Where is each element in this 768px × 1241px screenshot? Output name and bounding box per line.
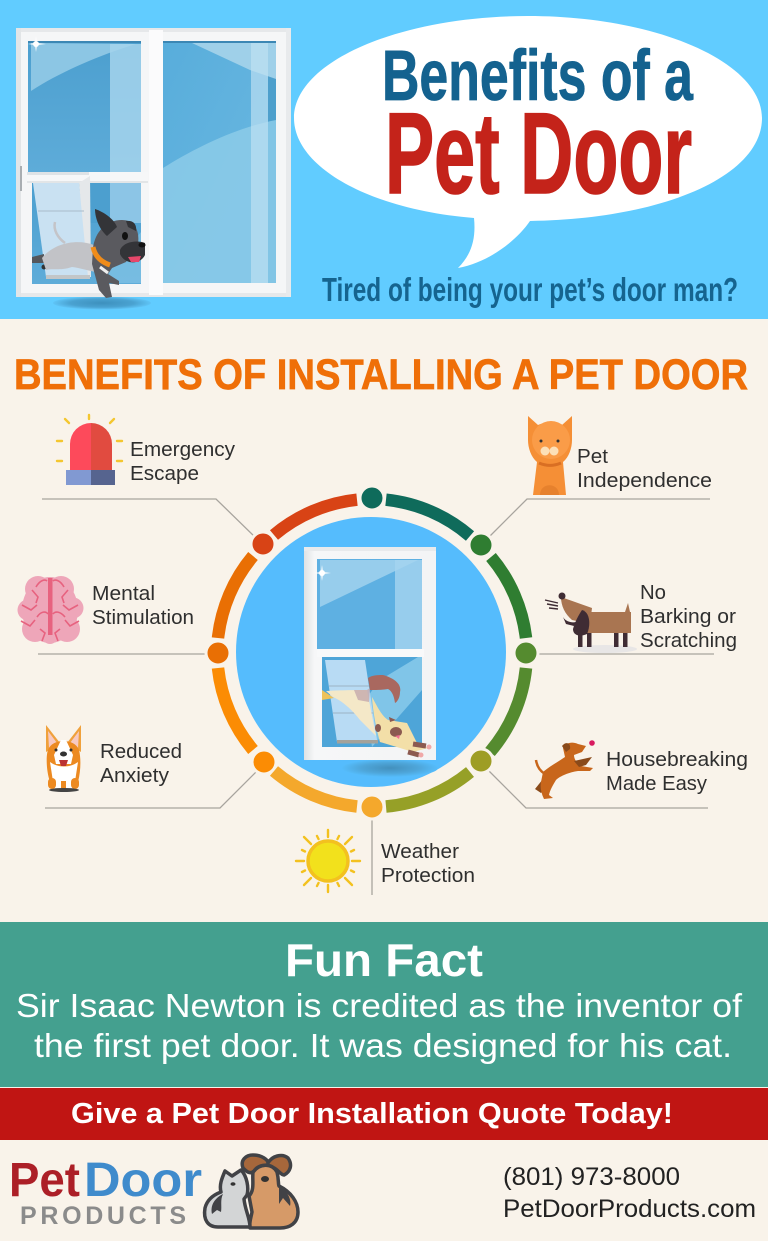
contact details [503,1163,756,1223]
diagram: central circle [206,486,538,819]
ring nodes [206,486,538,819]
fun fact text: Sir Isaac Newton is credited as the inventor of [16,987,743,1024]
icon: corgi [46,725,81,792]
glass pane: right [163,41,276,283]
benefit: Reduced Anxiety [46,725,182,792]
benefit: Emergency Escape: Escape [130,463,199,485]
benefit: Reduced Anxiety: Anxiety [100,765,169,787]
benefit: No Barking or Scratching: No [640,582,666,604]
benefit: Weather Protection: Protection [381,865,475,887]
panel: footer [0,1140,768,1241]
benefit: Weather Protection: Weather [381,841,459,863]
flap [33,176,91,279]
benefit: Weather Protection [296,830,475,892]
panel: benefits [0,319,768,922]
benefit: Mental Stimulation: Stimulation [92,607,194,629]
benefit: Mental Stimulation [18,576,194,644]
icon: brain [18,576,84,644]
fun fact text: the first pet door. It was designed for his cat. [34,1027,732,1064]
benefit: Reduced Anxiety: Reduced [100,741,182,763]
connector lines [38,499,714,895]
sparkle [28,36,46,52]
panel: call to action: Give a Pet Door Installation Quote Today! [71,1098,673,1130]
benefit: Mental Stimulation: Mental [92,583,155,605]
icon: sun [296,830,360,892]
benefit: Pet Independence: Pet [577,446,608,468]
benefit: Emergency Escape [57,415,235,485]
icon: cat [528,416,572,495]
logo [9,1154,298,1230]
logo: Pet [9,1154,80,1207]
speech bubble [294,16,762,268]
icon: jumping dog [535,740,595,799]
benefit: Housebreaking Made Easy: Housebreaking [606,749,748,771]
logo: PRODUCTS [20,1202,186,1230]
benefit: Pet Independence: Independence [577,470,712,492]
benefit: No Barking or Scratching [545,582,737,653]
benefit: Emergency Escape: Emergency [130,439,235,461]
contact details: (801) 973-8000 [503,1163,680,1191]
panel: call to action [0,1088,768,1140]
illustration: sliding window with dog [16,28,291,310]
illustration: window with cat [304,547,438,777]
fun fact text [16,987,743,1064]
benefit: Housebreaking Made Easy: Made Easy [606,773,707,795]
benefit: No Barking or Scratching: Barking or [640,606,736,628]
panel: fun fact [0,922,768,1087]
icon: dog and cat [205,1155,298,1228]
dog [32,209,146,298]
icon: barking dog [545,592,637,653]
ring segments [218,500,526,806]
icon: siren [57,415,122,485]
logo: Door [84,1154,202,1207]
panel: header [0,0,768,319]
benefit: Housebreaking Made Easy [535,740,748,799]
fun fact heading: Fun Fact [285,934,483,986]
benefit: Pet Independence [528,416,712,495]
contact details: PetDoorProducts.com [503,1195,756,1223]
benefit: No Barking or Scratching: Scratching [640,630,737,652]
